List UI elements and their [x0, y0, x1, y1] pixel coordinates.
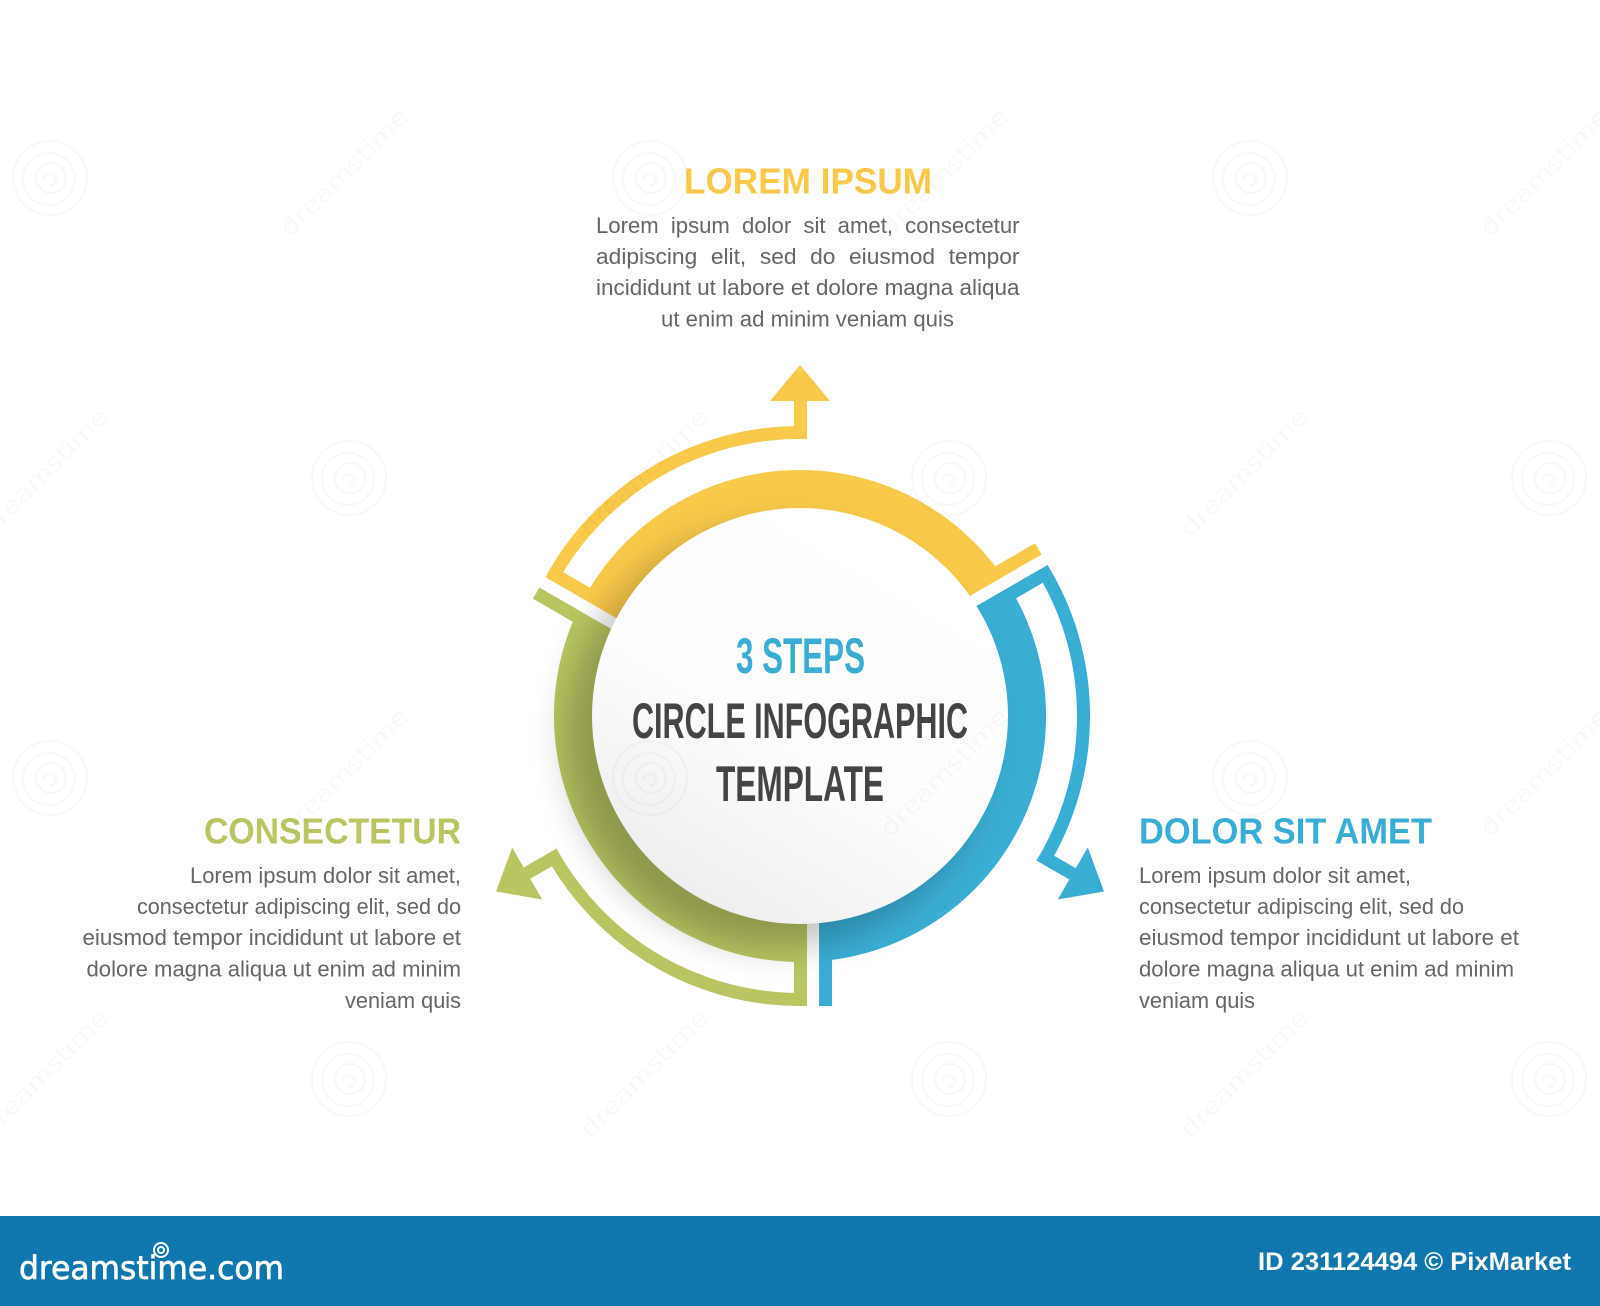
text block: dolor sit amet	[1139, 863, 1519, 1013]
watermark: dreamstime text: dreamstime	[574, 402, 714, 542]
text block: consectetur: Lorem ipsum dolor sit amet,	[190, 863, 461, 888]
heading: dolor sit amet: DOLOR SIT AMET	[1139, 810, 1432, 852]
watermark: dreamstime text: dreamstime	[1474, 702, 1600, 842]
center heading: circle infographic template	[632, 693, 968, 812]
text block: consectetur: consectetur adipiscing elit, sed do	[137, 894, 461, 919]
watermark: spirals	[13, 141, 1586, 1116]
text block: consectetur: dolore magna aliqua ut enim ad minim	[86, 956, 461, 982]
watermark: dreamstime text: dreamstime	[874, 702, 1014, 842]
watermark: dreamstime text	[0, 102, 1600, 1143]
text block: lorem ipsum	[596, 213, 1020, 332]
text block: consectetur: veniam quis	[345, 988, 461, 1013]
center disc shadow	[566, 527, 986, 947]
diagram: circular three-step cycle	[375, 365, 1231, 1112]
heading: consectetur: CONSECTETUR	[204, 810, 461, 852]
watermark: dreamstime text: dreamstime	[274, 702, 414, 842]
text block: dolor sit amet: consectetur adipiscing elit, sed do	[1139, 894, 1464, 919]
step shape: green arc with down-left arrow	[375, 549, 855, 1112]
text block: lorem ipsum: ut enim ad minim veniam quis	[661, 306, 954, 332]
step shape: blue arc with down-right arrow	[752, 537, 1231, 1101]
footer bar	[0, 1216, 1600, 1306]
step shape: yellow arc with up arrow	[545, 365, 1042, 632]
text block: lorem ipsum: incididunt ut labore et dolore magna aliqua	[596, 275, 1020, 300]
text block: consectetur	[82, 863, 461, 1013]
center heading: circle infographic template: CIRCLE INFOGRAPHIC	[632, 693, 968, 749]
watermark: dreamstime text: dreamstime	[574, 1003, 714, 1143]
footer logo text: dreamstime.com	[19, 1249, 284, 1287]
center heading: 3 steps: 3 STEPS	[736, 628, 865, 684]
watermark: dreamstime text: dreamstime	[1474, 102, 1600, 242]
center heading: circle infographic template: TEMPLATE	[716, 756, 884, 812]
text block: dolor sit amet: eiusmod tempor incididunt ut labore et	[1139, 925, 1519, 950]
footer logo spiral icon	[154, 1243, 168, 1257]
watermark: dreamstime text: dreamstime	[874, 102, 1014, 242]
text block: dolor sit amet: Lorem ipsum dolor sit amet,	[1139, 863, 1411, 888]
text block: lorem ipsum: Lorem ipsum dolor sit amet, consectetur	[596, 213, 1020, 238]
footer id and credit: ID 231124494 © PixMarket	[1258, 1248, 1572, 1276]
text block: dolor sit amet: dolore magna aliqua ut enim ad minim	[1139, 956, 1514, 982]
text block: lorem ipsum: adipiscing elit, sed do eiusmod tempor	[596, 244, 1020, 269]
text block: consectetur: eiusmod tempor incididunt ut labore et	[82, 925, 461, 950]
watermark: dreamstime text: dreamstime	[1174, 402, 1314, 542]
center disc	[592, 508, 1008, 924]
watermark: dreamstime text: dreamstime	[274, 102, 414, 242]
text block: dolor sit amet: veniam quis	[1139, 988, 1255, 1013]
watermark: dreamstime text: dreamstime	[1174, 1003, 1314, 1143]
heading: lorem ipsum: LOREM IPSUM	[684, 160, 932, 202]
